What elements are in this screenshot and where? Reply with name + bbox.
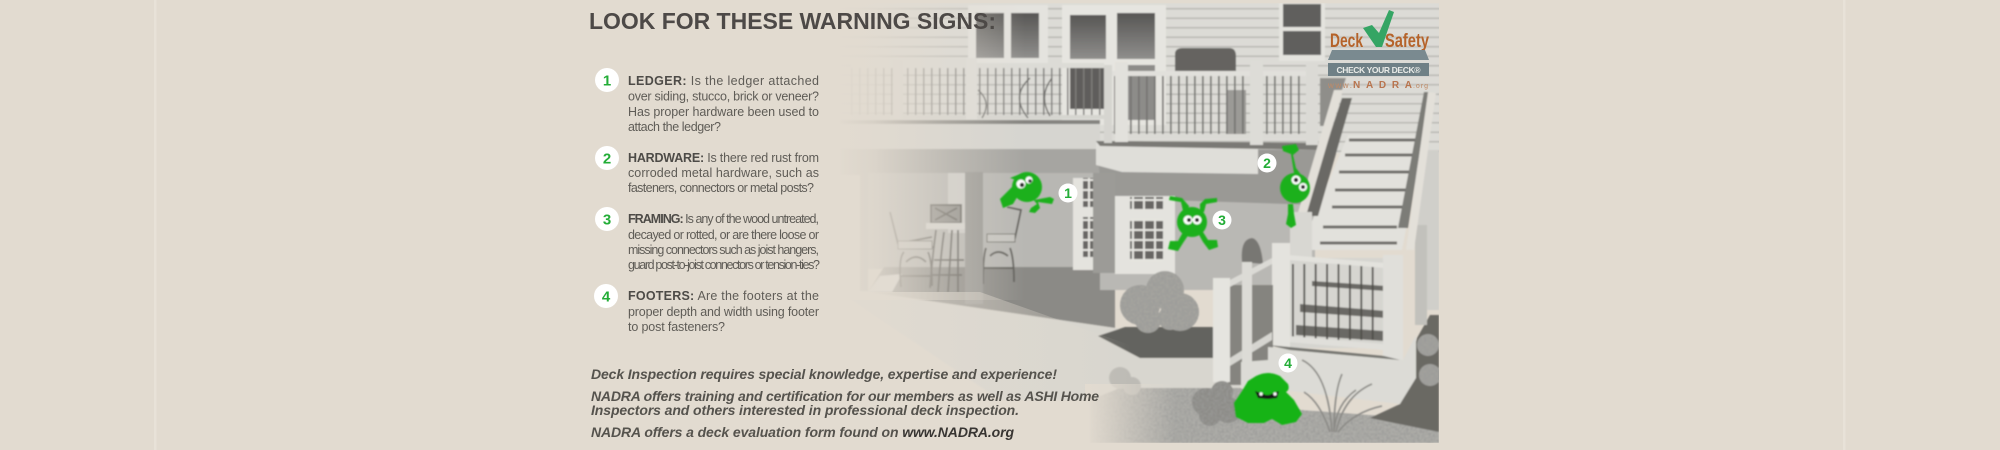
upper left window — [968, 5, 1048, 65]
deck fascia — [840, 124, 1100, 149]
logo banner: CHECK YOUR DECK® — [1336, 65, 1421, 75]
ornamental grass — [1302, 360, 1382, 432]
upper deck floor — [840, 120, 1100, 124]
framing text: missing connectors such as joist hangers, — [628, 243, 819, 257]
stair house wall — [1345, 90, 1439, 150]
ledger text: attach the ledger? — [628, 120, 721, 134]
right lower wall — [1415, 150, 1439, 310]
closing statement — [591, 366, 1099, 440]
upper railing — [851, 58, 1104, 124]
badge 3 — [1212, 210, 1232, 230]
footers text — [628, 289, 819, 334]
small shrub — [1192, 381, 1241, 426]
number badge 4: 4 — [602, 288, 611, 306]
back small tree — [1242, 238, 1263, 264]
lower side railing — [1213, 258, 1273, 385]
bump-out railing — [1104, 60, 1318, 145]
logo url: www. — [1327, 81, 1352, 90]
dark wall beside stairs — [1320, 78, 1346, 126]
logo check mark — [1363, 10, 1394, 47]
logo roof — [1328, 50, 1429, 60]
footers text: FOOTERS: Are the footers at the — [628, 289, 819, 303]
bottom strip under illustration — [835, 443, 1455, 450]
gremlin 2 — [1280, 144, 1310, 228]
logo word Deck: Deck — [1330, 31, 1363, 52]
logo: Deck Safety — [1327, 10, 1429, 91]
light pier behind column — [948, 173, 965, 233]
badge 2: 2 — [1263, 155, 1271, 171]
badge 4: 4 — [1284, 355, 1292, 371]
house wall and siding — [840, 3, 1440, 153]
column at right of stairs — [1415, 225, 1427, 325]
number badge 3: 3 — [603, 212, 611, 228]
patio chairs and table — [890, 205, 1021, 292]
bush — [1120, 271, 1199, 333]
column beside door — [1093, 173, 1115, 273]
upper stairs — [1297, 90, 1436, 250]
item 2: hardware — [595, 146, 819, 195]
badge 1 — [1058, 184, 1078, 202]
number badge 1: 1 — [603, 72, 611, 90]
framing text: FRAMING: Is any of the wood untreated, — [628, 212, 819, 226]
framing text: decayed or rotted, or are there loose or — [628, 228, 819, 242]
right wall below soffit — [1100, 200, 1315, 290]
paver patio — [840, 292, 1240, 400]
badge 4 — [1278, 354, 1298, 372]
lower steps floor — [1268, 345, 1400, 360]
upper right window — [1279, 3, 1325, 61]
bump-out deck floor — [1096, 141, 1330, 150]
item 3: framing — [595, 207, 820, 272]
logo url: .org — [1413, 83, 1428, 90]
closing statement: Deck Inspection requires special knowledge, expertise and experience! — [591, 366, 1057, 382]
badge 2 — [1258, 154, 1276, 172]
patio door — [1073, 178, 1094, 270]
title: LOOK FOR THESE WARNING SIGNS: — [589, 8, 996, 34]
gremlin 3 — [1168, 196, 1218, 251]
item 4: footers — [594, 284, 819, 334]
closing statement: NADRA offers a deck evaluation form found on www.NADRA.org — [591, 424, 1014, 440]
plant at right — [1417, 334, 1441, 386]
logo url — [1327, 80, 1428, 91]
framing text: guard post-to-joist connectors or tension-ties? — [628, 258, 820, 272]
number badge 3 — [595, 207, 619, 231]
gremlin 1 — [1000, 172, 1054, 213]
wall left pier — [860, 173, 868, 291]
upper door — [1062, 5, 1166, 125]
number badge 2: 2 — [603, 150, 611, 168]
fade overlay over left of illustration — [835, 0, 1025, 300]
gravel fade overlay — [1085, 384, 1175, 446]
closing statement: NADRA offers training and certification for our members as well as ASHI Home — [591, 388, 1099, 404]
footers text: proper depth and width using footer — [628, 305, 819, 319]
number badge 2 — [595, 146, 619, 170]
curved railing balusters — [978, 78, 1052, 118]
number badge 4 — [594, 284, 618, 308]
illustration: house and deck — [840, 3, 1441, 443]
item 1: ledger — [595, 68, 819, 134]
deck base box — [1241, 335, 1416, 404]
ledger text: LEDGER: Is the ledger attached — [628, 74, 819, 88]
bump-out fascia — [1096, 143, 1258, 174]
right strip beside illustration — [1439, 0, 1459, 450]
hardware text: corroded metal hardware, such as — [628, 166, 819, 180]
grill — [1175, 48, 1246, 138]
footers text: to post fasteners? — [628, 320, 725, 334]
patio back wall — [860, 173, 1100, 269]
post at foot of stairs — [1290, 212, 1312, 260]
framing text — [628, 212, 820, 272]
hardware text: fasteners, connectors or metal posts? — [628, 181, 814, 195]
ledger text: over siding, stucco, brick or veneer? — [628, 90, 819, 104]
right garden bed — [1370, 315, 1439, 432]
hardware text — [628, 151, 819, 195]
hardware text: HARDWARE: Is there red rust from — [628, 151, 819, 165]
mulch bed — [1098, 327, 1213, 358]
ledger text: Has proper hardware been used to — [628, 105, 819, 119]
logo url: NADRA — [1353, 80, 1412, 91]
badge 1: 1 — [1064, 185, 1072, 201]
under-deck soffit — [840, 149, 1100, 175]
lower stair landing railing — [1272, 243, 1403, 361]
logo word Safety: Safety — [1385, 31, 1429, 52]
under-deck column — [965, 172, 983, 304]
lower window — [1115, 196, 1175, 274]
gremlin 4 — [1234, 373, 1302, 425]
top strip above illustration — [835, 0, 1455, 3]
closing statement: Inspectors and others interested in professional deck inspection. — [591, 402, 1019, 418]
small fading shrub — [1109, 367, 1141, 395]
gravel yard — [1090, 388, 1439, 443]
badge 3: 3 — [1218, 212, 1226, 228]
patio floor — [868, 267, 1115, 328]
soffit drop — [1097, 148, 1325, 205]
number badge 1 — [595, 68, 619, 92]
lower fade overlay — [835, 292, 1130, 450]
ledger text — [628, 74, 819, 134]
sunny patch on floor — [868, 274, 902, 292]
